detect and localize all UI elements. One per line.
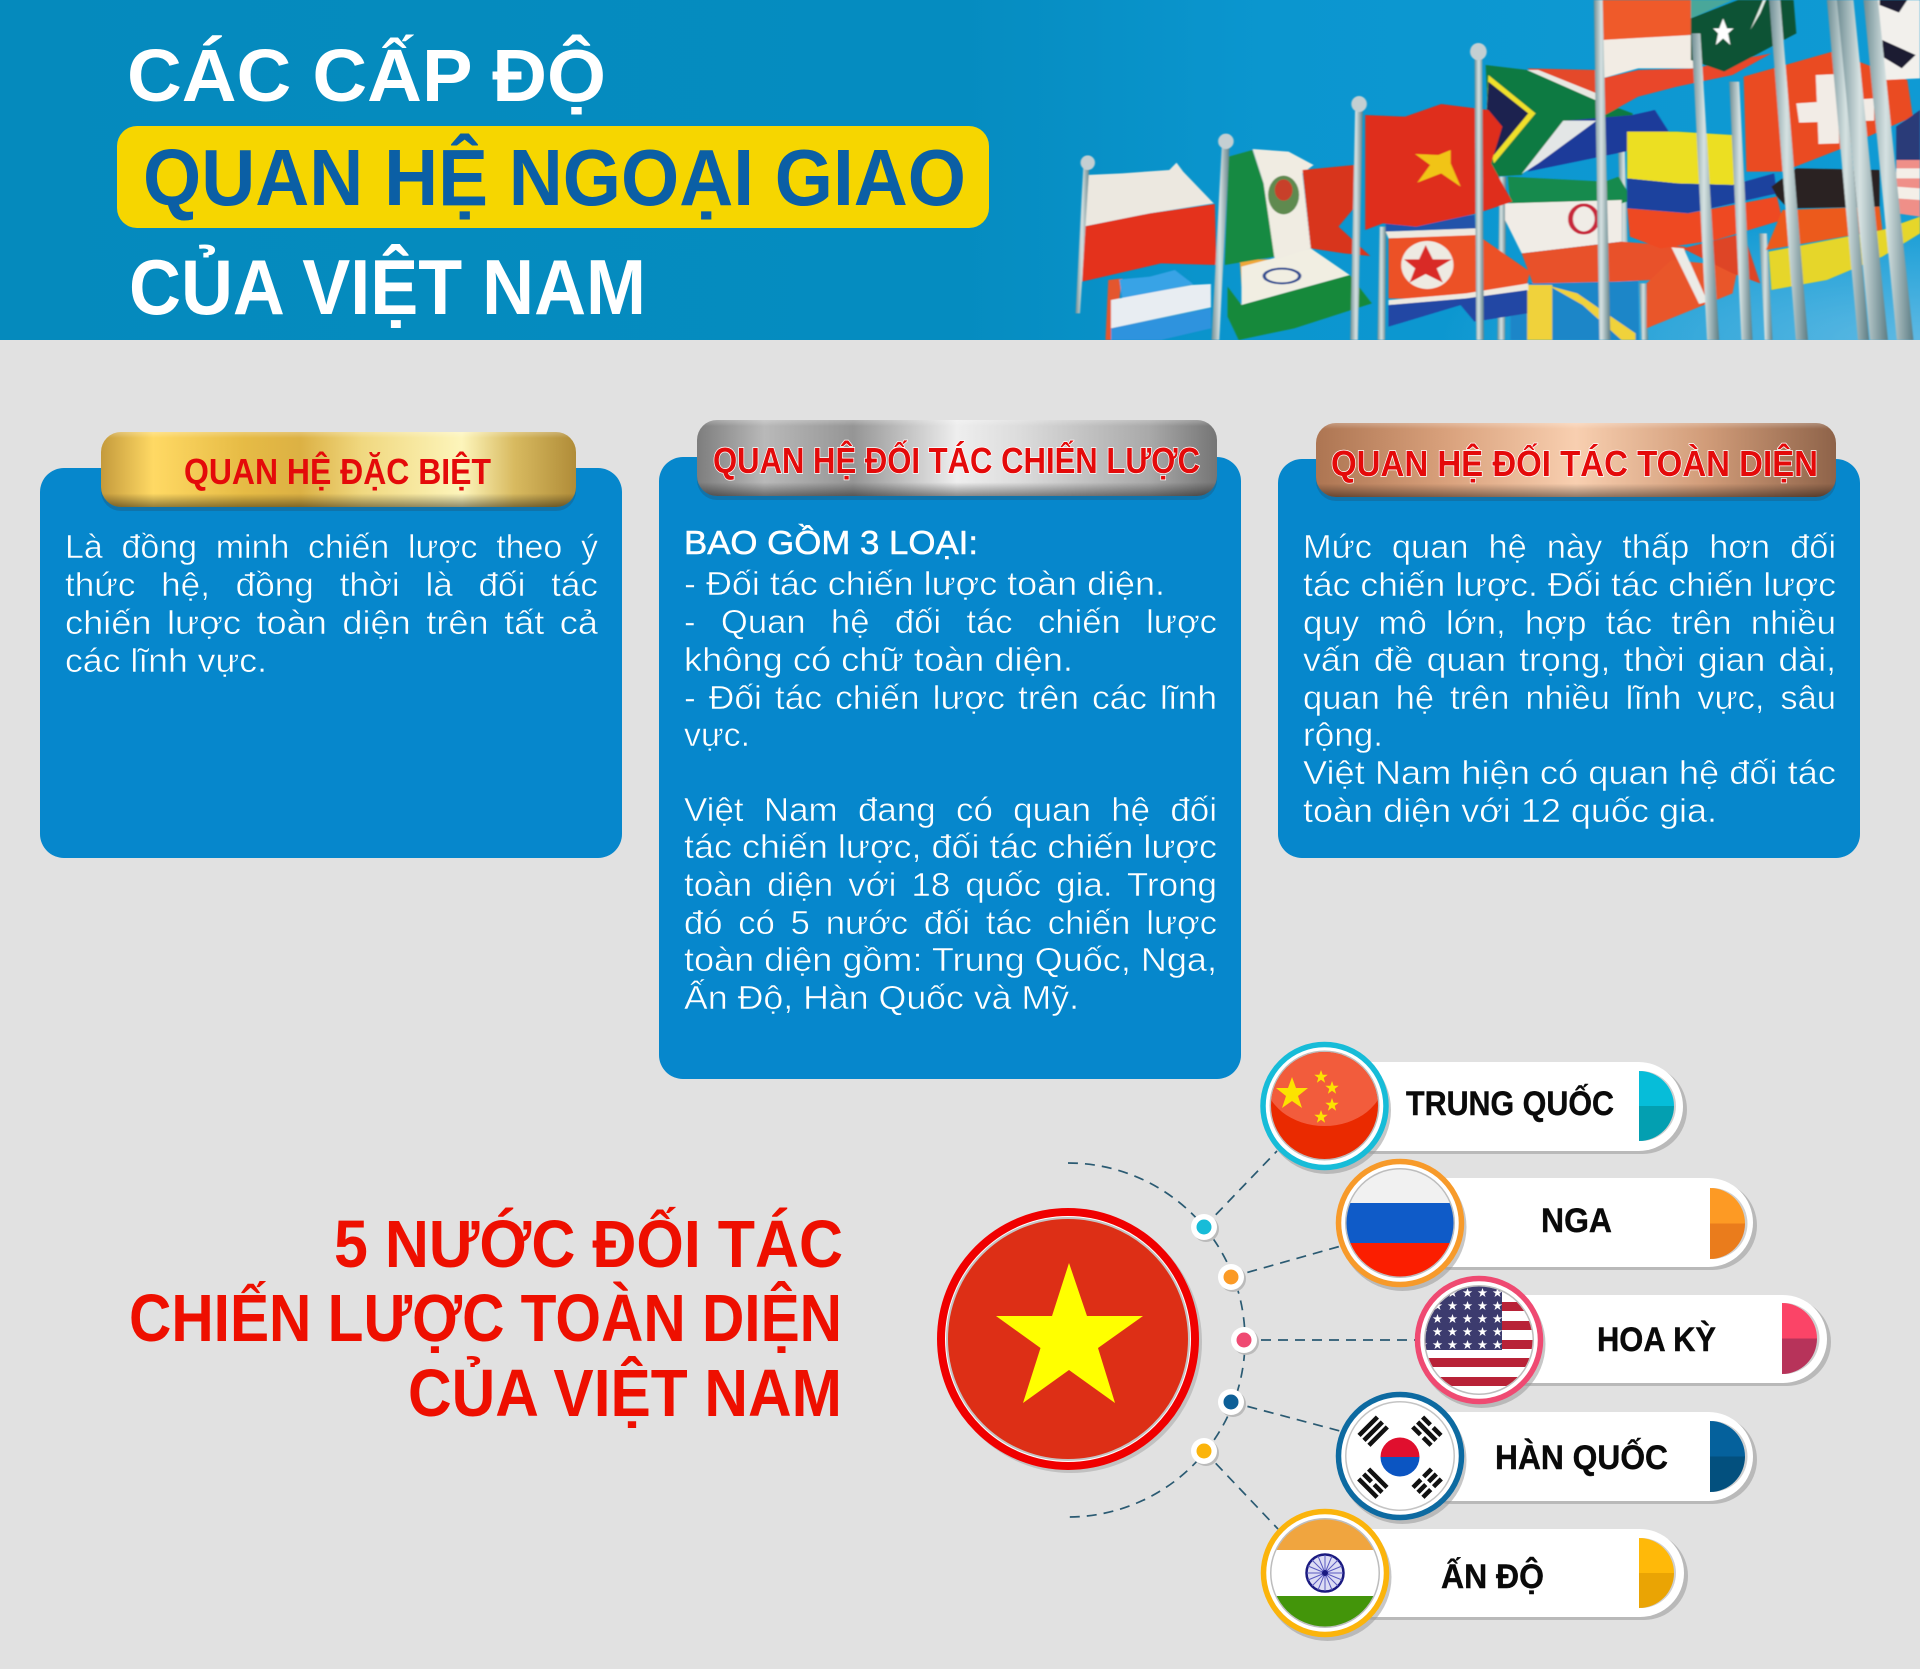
body text: Mức quan hệ này thấp hơn đối [1303,528,1836,565]
heading: 5 strategic partners [129,1206,843,1431]
title line 1: CÁC CẤP ĐỘ [127,34,606,117]
icon: USA flag [1418,1278,1546,1408]
flag: USA [1896,110,1920,160]
body text: Là đồng minh chiến lược theo ý [65,528,599,565]
body text: tác chiến lược. Đối tác chiến lược [1303,566,1836,603]
body text: BAO GỒM 3 LOẠI: [684,524,978,561]
flag: South Korea [1876,0,1920,81]
country pill: Hàn Quốc [1338,1394,1757,1524]
body text: Ấn Độ, Hàn Quốc và Mỹ. [684,979,1079,1016]
badge: copper heading [1316,423,1836,501]
flag: India (photo) [1238,258,1270,286]
body text [1303,528,1836,829]
body text: các lĩnh vực. [65,642,267,679]
body text: rộng. [1303,716,1383,753]
body text: toàn diện với 12 quốc gia. [1303,792,1717,829]
connector lines [1068,1151,1416,1529]
flag: Switzerland [1744,52,1913,172]
heading: 5 strategic partners: 5 NƯỚC ĐỐI TÁC [334,1206,843,1282]
body text: Việt Nam hiện có quan hệ đối tác [1303,754,1836,791]
body text: - Đối tác chiến lược toàn diện. [684,565,1165,602]
flag: Pakistan [1691,0,1733,18]
body text: vấn đề quan trọng, thời gian dài, [1303,641,1836,678]
flag: South Africa [1527,68,1597,93]
country pill: Hoa Kỳ [1418,1278,1831,1408]
icon: South Korea flag [1338,1394,1466,1524]
country pill: Hoa Kỳ: HOA KỲ [1597,1321,1716,1359]
flag: Austria-like [1602,0,1691,40]
flag: Mexico [1225,150,1275,265]
country pill: Trung Quốc: TRUNG QUỐC [1406,1084,1614,1123]
flag: Vietnam (photo) [1365,104,1512,230]
body text: quan hệ trên nhiều lĩnh vực, sâu [1303,679,1836,716]
badge: gold heading [101,432,576,511]
node: blue [1218,1389,1246,1417]
badge: silver heading: QUAN HỆ ĐỐI TÁC CHIẾN LƯỢC [713,439,1200,481]
body text: không có chữ toàn diện. [684,641,1073,678]
node: pink [1231,1327,1259,1355]
flag: Iran [1507,176,1628,204]
country pill: Trung Quốc [1263,1030,1687,1174]
pole finials [1081,43,1487,170]
badge: gold heading: QUAN HỆ ĐẶC BIỆT [184,450,491,492]
flag: Colombia [1627,132,1735,185]
flag: red lower [1647,260,1738,328]
heading: 5 strategic partners: CỦA VIỆT NAM [408,1356,842,1431]
body text: quy mô lớn, hợp tác trên nhiều [1303,604,1836,641]
body text: - Đối tác chiến lược trên các lĩnh [684,679,1217,716]
front poles [1076,0,1913,340]
icon: India flag [1264,1512,1392,1641]
badge: silver heading [697,420,1217,500]
body text: vực. [684,716,750,753]
icon: China flag [1263,1030,1391,1174]
panel: quan he doi tac chien luoc [659,420,1241,1079]
country pill: Hàn Quốc: HÀN QUỐC [1495,1438,1668,1477]
panel: quan he dac biet [40,432,622,858]
flag: Germany [1771,168,1880,208]
header banner [0,0,1920,340]
photo: world flags on poles [1050,0,1920,340]
back poles [1377,150,1772,340]
title highlight: yellow box: QUAN HỆ NGOẠI GIAO [143,133,966,222]
body text [684,524,1217,1016]
body text: đó có 5 nước đối tác chiến lược [684,904,1217,941]
connector nodes [1191,1214,1259,1466]
body text: tác chiến lược, đối tác chiến lược [684,828,1217,865]
body text: chiến lược toàn diện trên tất cả [65,604,599,641]
country pill: Nga [1338,1162,1757,1291]
flag: Poland [1083,163,1214,227]
heading: 5 strategic partners: CHIẾN LƯỢC TOÀN DIỆN [129,1281,842,1356]
badge: copper heading: QUAN HỆ ĐỐI TÁC TOÀN DIỆN [1331,442,1818,484]
panel: quan he doi tac toan dien [1278,423,1860,858]
flag: Sweden [1511,278,1639,340]
country pill: Ấn Độ [1264,1512,1688,1641]
body text: thức hệ, đồng thời là đối tác [65,566,598,603]
node: orange [1218,1264,1246,1292]
body text: toàn diện gồm: Trung Quốc, Nga, [684,941,1217,978]
flag: North Korea [1386,215,1476,232]
node: yellow [1191,1438,1219,1466]
body text [65,528,599,679]
country pill: Nga: NGA [1541,1202,1612,1240]
icon: Vietnam flag circle [940,1211,1202,1473]
icon: Russia flag [1338,1162,1466,1291]
title line 3: CỦA VIỆT NAM [129,243,646,331]
body text: toàn diện với 18 quốc gia. Trong [684,866,1217,903]
body text: - Quan hệ đối tác chiến lược [684,603,1217,640]
body text: Việt Nam đang có quan hệ đối [684,791,1217,828]
flag: Argentina [1105,278,1122,340]
country pill: Ấn Độ: ẤN ĐỘ [1441,1557,1544,1596]
node: cyan [1191,1214,1219,1242]
